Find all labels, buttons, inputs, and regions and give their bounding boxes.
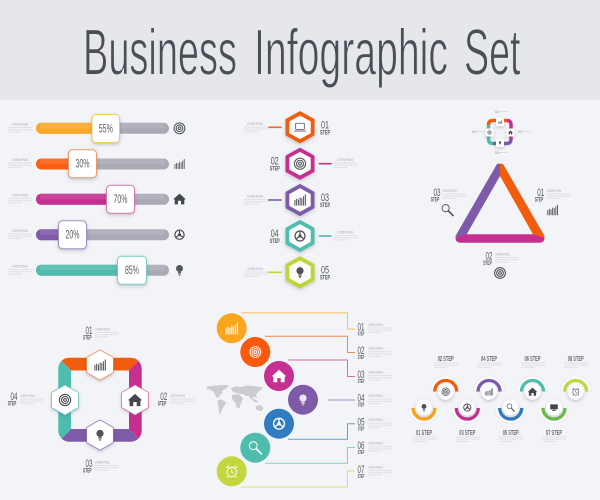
world map: [206, 385, 264, 416]
arc step 03: [452, 400, 483, 442]
step 03 label: [431, 187, 466, 216]
slider 70%: [8, 185, 186, 213]
label 04: [8, 391, 44, 408]
hex step 02: 02: [271, 156, 279, 168]
step 01 row: [217, 313, 392, 343]
step 04 row: 04: [358, 393, 364, 405]
panel: circle chain with world map: [206, 313, 392, 487]
step 01 label: 01: [537, 187, 544, 199]
label 01: LOREM IPSUM: [95, 328, 110, 332]
step 02 row: 02: [358, 345, 364, 357]
panel: percentage sliders: [8, 114, 186, 284]
step 03 row: 03: [358, 369, 364, 381]
label 02: STEP: [158, 400, 167, 408]
hex left: [52, 385, 78, 415]
slider 20%: 20%: [66, 230, 80, 242]
step 03 row: STEP: [358, 379, 364, 385]
step 03 row: [264, 360, 392, 391]
hex step 01: 01: [321, 120, 329, 132]
step 02 label: LOREM IPSUM: [495, 252, 509, 256]
ring: [58, 357, 142, 442]
arc step 01: [408, 400, 440, 442]
hex step 05: 05: [321, 264, 329, 276]
slider 20%: LOREM IPSUM: [12, 229, 28, 233]
panel: square hexagon cycle: [8, 325, 194, 474]
hex step 03: LOREM IPSUM: [247, 194, 263, 198]
slider 85%: LOREM IPSUM: [12, 264, 28, 268]
hex step 04: LOREM IPSUM: [337, 230, 353, 234]
step 04 row: LOREM IPSUM: [368, 394, 383, 398]
slider 85%: [8, 256, 183, 284]
label 02: 02: [160, 391, 167, 403]
slider 70%: LOREM IPSUM: [12, 194, 28, 198]
step 07 row: [217, 456, 392, 487]
step 01 row: 01: [358, 322, 364, 334]
arc step 06: [517, 356, 548, 400]
triangle ring: [456, 164, 544, 243]
hex step 03: 03: [321, 192, 329, 204]
arc step 04: 04 STEP: [481, 356, 497, 363]
title: Infographic: [254, 16, 448, 88]
arc step 02: [430, 356, 461, 400]
hex step 05: STEP: [320, 274, 330, 282]
label 02: [158, 391, 194, 408]
hex top: [87, 350, 113, 380]
step 07 row: LOREM IPSUM: [368, 466, 383, 470]
hex bottom: [87, 420, 113, 450]
arc step 03: 03 STEP: [459, 430, 475, 437]
hex step 04: [270, 221, 358, 251]
slider 30%: [8, 150, 185, 178]
hex step 04: STEP: [270, 238, 280, 245]
step 03 row: LOREM IPSUM: [368, 370, 383, 374]
title: [83, 16, 520, 88]
hex step 04: 04: [271, 228, 279, 240]
arc step 07: [538, 400, 570, 442]
step 02 row: STEP: [358, 355, 364, 361]
header band: [0, 0, 600, 100]
step 05 row: 05: [358, 416, 364, 428]
label 01: STEP: [83, 334, 92, 342]
slider 55%: [8, 114, 185, 142]
panel: mini square cycle: 02: [518, 130, 522, 134]
step 03 label: STEP: [431, 196, 440, 204]
hex step 03: [244, 185, 330, 215]
step 06 row: LOREM IPSUM: [368, 442, 383, 446]
step 03 label: 03: [434, 187, 440, 199]
slider 85%: 85%: [125, 265, 139, 277]
slider 30%: 30%: [76, 159, 90, 171]
label 04: STEP: [8, 400, 17, 408]
label 03: LOREM IPSUM: [95, 460, 110, 464]
step 07 row: STEP: [358, 474, 364, 480]
slider 55%: LOREM IPSUM: [12, 122, 28, 126]
panel: mini square cycle: 01: [495, 110, 499, 114]
hex step 01: LOREM IPSUM: [247, 122, 263, 126]
slider 30%: LOREM IPSUM: [12, 158, 28, 162]
step 04 row: STEP: [358, 403, 364, 409]
panel: arc timeline: [408, 356, 591, 442]
step 02 label: 02: [486, 250, 492, 262]
hex step 02: [270, 149, 358, 179]
hex step 05: [244, 257, 330, 287]
arc step 04: [473, 356, 505, 400]
panel: mini square cycle: 04: [472, 130, 476, 134]
slider 70%: 70%: [114, 194, 128, 206]
label 03: 03: [86, 458, 92, 470]
hex step 02: LOREM IPSUM: [337, 158, 353, 162]
arc step 08: 08 STEP: [568, 356, 584, 363]
step 06 row: [240, 433, 392, 463]
step 05 row: LOREM IPSUM: [368, 418, 383, 422]
arc step 06: 06 STEP: [524, 356, 541, 363]
step 02 row: LOREM IPSUM: [368, 347, 383, 351]
label 01: 01: [86, 325, 92, 337]
arc step 01: 01 STEP: [416, 430, 432, 437]
arc step 08: [560, 356, 591, 400]
arc step 07: 07 STEP: [546, 430, 562, 437]
arc step 02: 02 STEP: [438, 356, 454, 363]
step 01 label: LOREM IPSUM: [547, 189, 561, 193]
step 01 row: LOREM IPSUM: [368, 323, 383, 327]
label 03: STEP: [83, 468, 92, 474]
step 06 row: STEP: [358, 450, 364, 456]
step 05 row: STEP: [358, 426, 364, 432]
label 02: LOREM IPSUM: [170, 394, 185, 398]
step 01 label: STEP: [535, 196, 544, 204]
title: Set: [464, 16, 520, 88]
step 02 label: [483, 250, 519, 278]
hex step 02: STEP: [270, 166, 280, 172]
step 01 row: STEP: [358, 332, 364, 338]
step 01 label: [535, 187, 571, 215]
label 04: LOREM IPSUM: [20, 394, 35, 398]
panel: mini square cycle: [472, 110, 531, 155]
step 04 row: [288, 385, 392, 415]
hex step 01: STEP: [320, 130, 330, 136]
label 03: [83, 458, 119, 474]
step 03 label: LOREM IPSUM: [442, 189, 456, 193]
slider 20%: [8, 221, 184, 249]
panel: triangle cycle: [431, 164, 571, 278]
arc step 05: [495, 400, 526, 442]
label 01: [83, 325, 119, 342]
slider 55%: 55%: [99, 123, 113, 135]
hex right: [122, 385, 148, 415]
label 04: 04: [10, 391, 18, 403]
step 02 label: STEP: [483, 260, 492, 267]
hex step 05: LOREM IPSUM: [247, 267, 263, 271]
panel: hexagon steps: [244, 112, 358, 287]
arc step 05: 05 STEP: [503, 430, 519, 437]
step 02 row: [240, 336, 392, 367]
hex step 01: [244, 112, 330, 142]
step 07 row: 07: [358, 464, 364, 476]
step 05 row: [264, 409, 392, 439]
step 06 row: 06: [358, 440, 364, 452]
title: Business: [83, 16, 237, 88]
hex step 03: STEP: [320, 202, 330, 209]
panel: mini square cycle: 03: [495, 151, 499, 155]
